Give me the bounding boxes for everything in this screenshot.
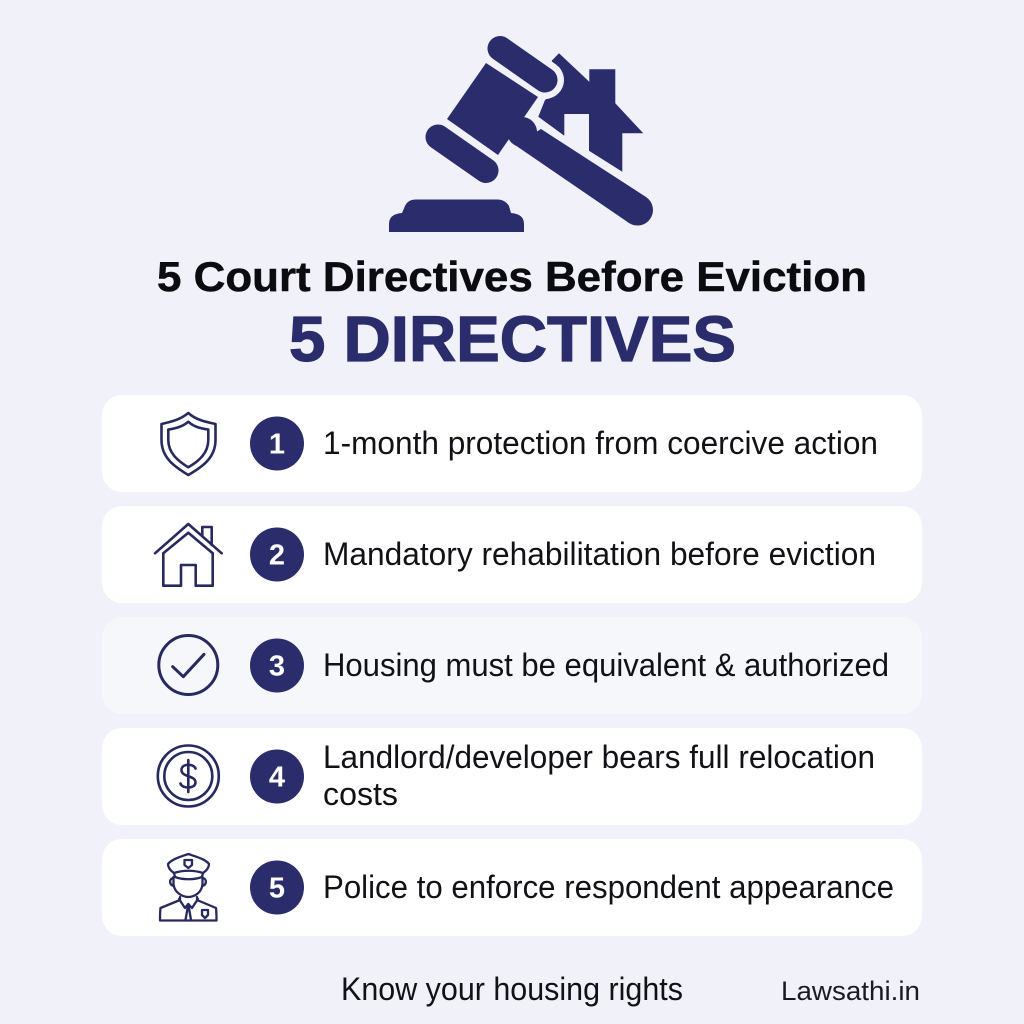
icon: check circle bbox=[159, 636, 218, 694]
text: directive 4: Landlord/developer bears full relocation bbox=[323, 739, 875, 775]
title: 5 Court Directives Before Eviction bbox=[157, 253, 867, 300]
number badge 1: 1 bbox=[269, 428, 285, 460]
text: directive 1: 1-month protection from coercive action bbox=[323, 425, 878, 461]
icon: police officer bbox=[160, 854, 216, 920]
footer tagline: Know your housing rights bbox=[341, 971, 683, 1007]
text: directive 4 bbox=[323, 739, 875, 812]
panel: directive 5 bbox=[102, 839, 922, 936]
icon: shield bbox=[162, 413, 216, 475]
text: directive 2: Mandatory rehabilitation before eviction bbox=[323, 536, 876, 572]
number badge 3 bbox=[250, 638, 304, 692]
panel: directive 2 bbox=[102, 506, 922, 603]
text: directive 3: Housing must be equivalent & authorized bbox=[323, 647, 889, 683]
number badge 4 bbox=[250, 750, 304, 804]
number badge 2: 2 bbox=[269, 540, 285, 572]
panel: directive 1 bbox=[102, 395, 922, 492]
text: directive 5: Police to enforce respondent appearance bbox=[323, 869, 894, 905]
number badge 5: 5 bbox=[269, 872, 285, 904]
number badge 3: 3 bbox=[269, 650, 285, 682]
number badge 2 bbox=[250, 528, 304, 582]
icon: gavel striking over house bbox=[389, 48, 653, 232]
footer brand: Lawsathi.in bbox=[781, 976, 920, 1006]
panel: directive 3 bbox=[102, 617, 922, 714]
number badge 5 bbox=[250, 860, 304, 914]
panel: directive 4 bbox=[102, 728, 922, 825]
icon: dollar coin bbox=[158, 746, 219, 806]
subtitle: 5 DIRECTIVES bbox=[289, 303, 736, 375]
number badge 4: 4 bbox=[269, 762, 285, 794]
text: directive 4: costs bbox=[323, 776, 398, 812]
number badge 1 bbox=[250, 416, 304, 470]
icon: house bbox=[155, 524, 222, 586]
